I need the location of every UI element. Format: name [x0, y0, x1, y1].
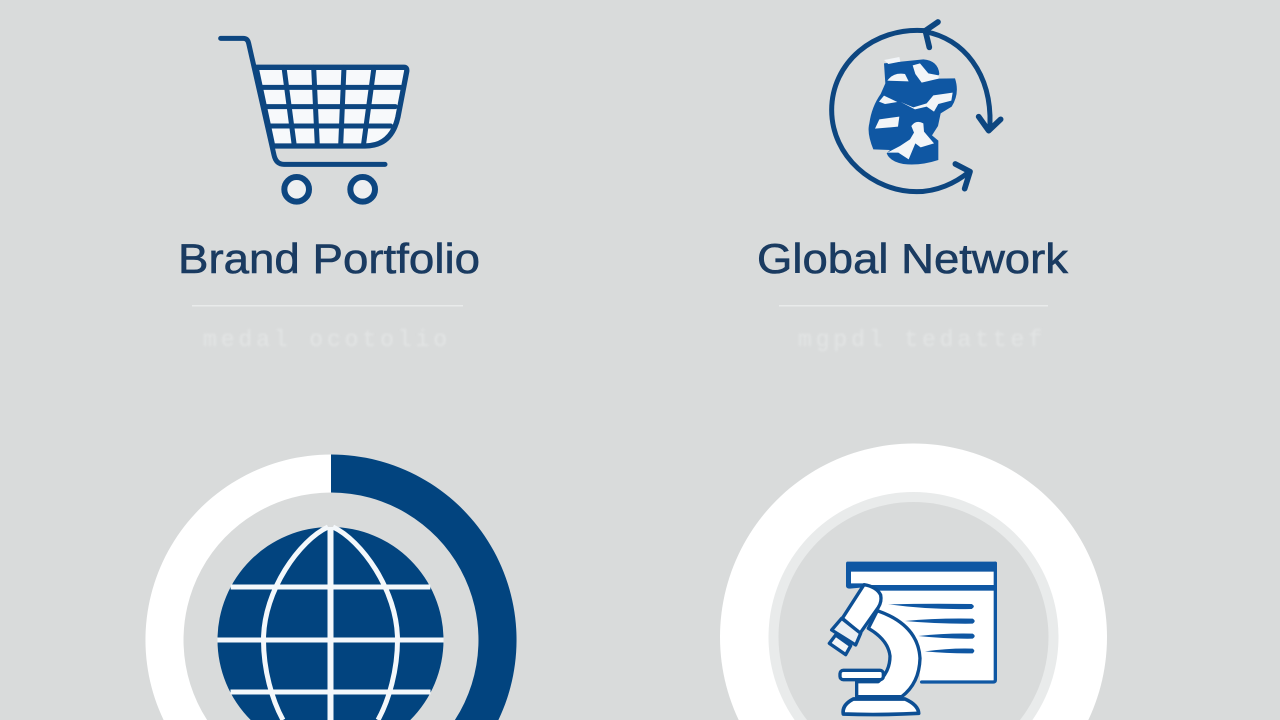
icon: rotating globe	[832, 22, 1001, 192]
divider	[779, 305, 1048, 306]
microscope stage	[840, 670, 883, 680]
panel: progress ring with globe	[145, 454, 517, 720]
ring progress arc	[331, 454, 517, 720]
microscope lens	[829, 635, 851, 655]
faint caption: mgpdl tedattef	[798, 327, 1042, 353]
inner disc	[778, 502, 1048, 720]
microscope base	[843, 699, 919, 715]
microscope collar	[832, 618, 861, 645]
panel: brand portfolio	[178, 38, 480, 353]
inner pale ring	[768, 492, 1059, 720]
map blob	[869, 59, 957, 164]
rotation arrows	[832, 30, 969, 192]
ring track	[145, 454, 331, 720]
divider	[192, 305, 463, 306]
icon: globe	[218, 527, 444, 720]
panel: research ring with microscope	[720, 444, 1107, 720]
microscope tube	[842, 585, 881, 633]
icon: microscope and document	[829, 562, 997, 715]
heading: Global Network: Global Network	[757, 235, 1069, 282]
document text lines	[888, 604, 975, 653]
panel: global network	[757, 22, 1069, 353]
microscope arm	[857, 611, 920, 697]
document body	[880, 588, 996, 682]
heading: Brand Portfolio: Brand Portfolio	[178, 235, 480, 282]
faint caption: medal ocotolio	[203, 327, 447, 353]
map highlights	[875, 57, 953, 159]
outer ring	[720, 444, 1107, 720]
icon: shopping cart	[221, 38, 407, 202]
document header	[848, 572, 995, 588]
